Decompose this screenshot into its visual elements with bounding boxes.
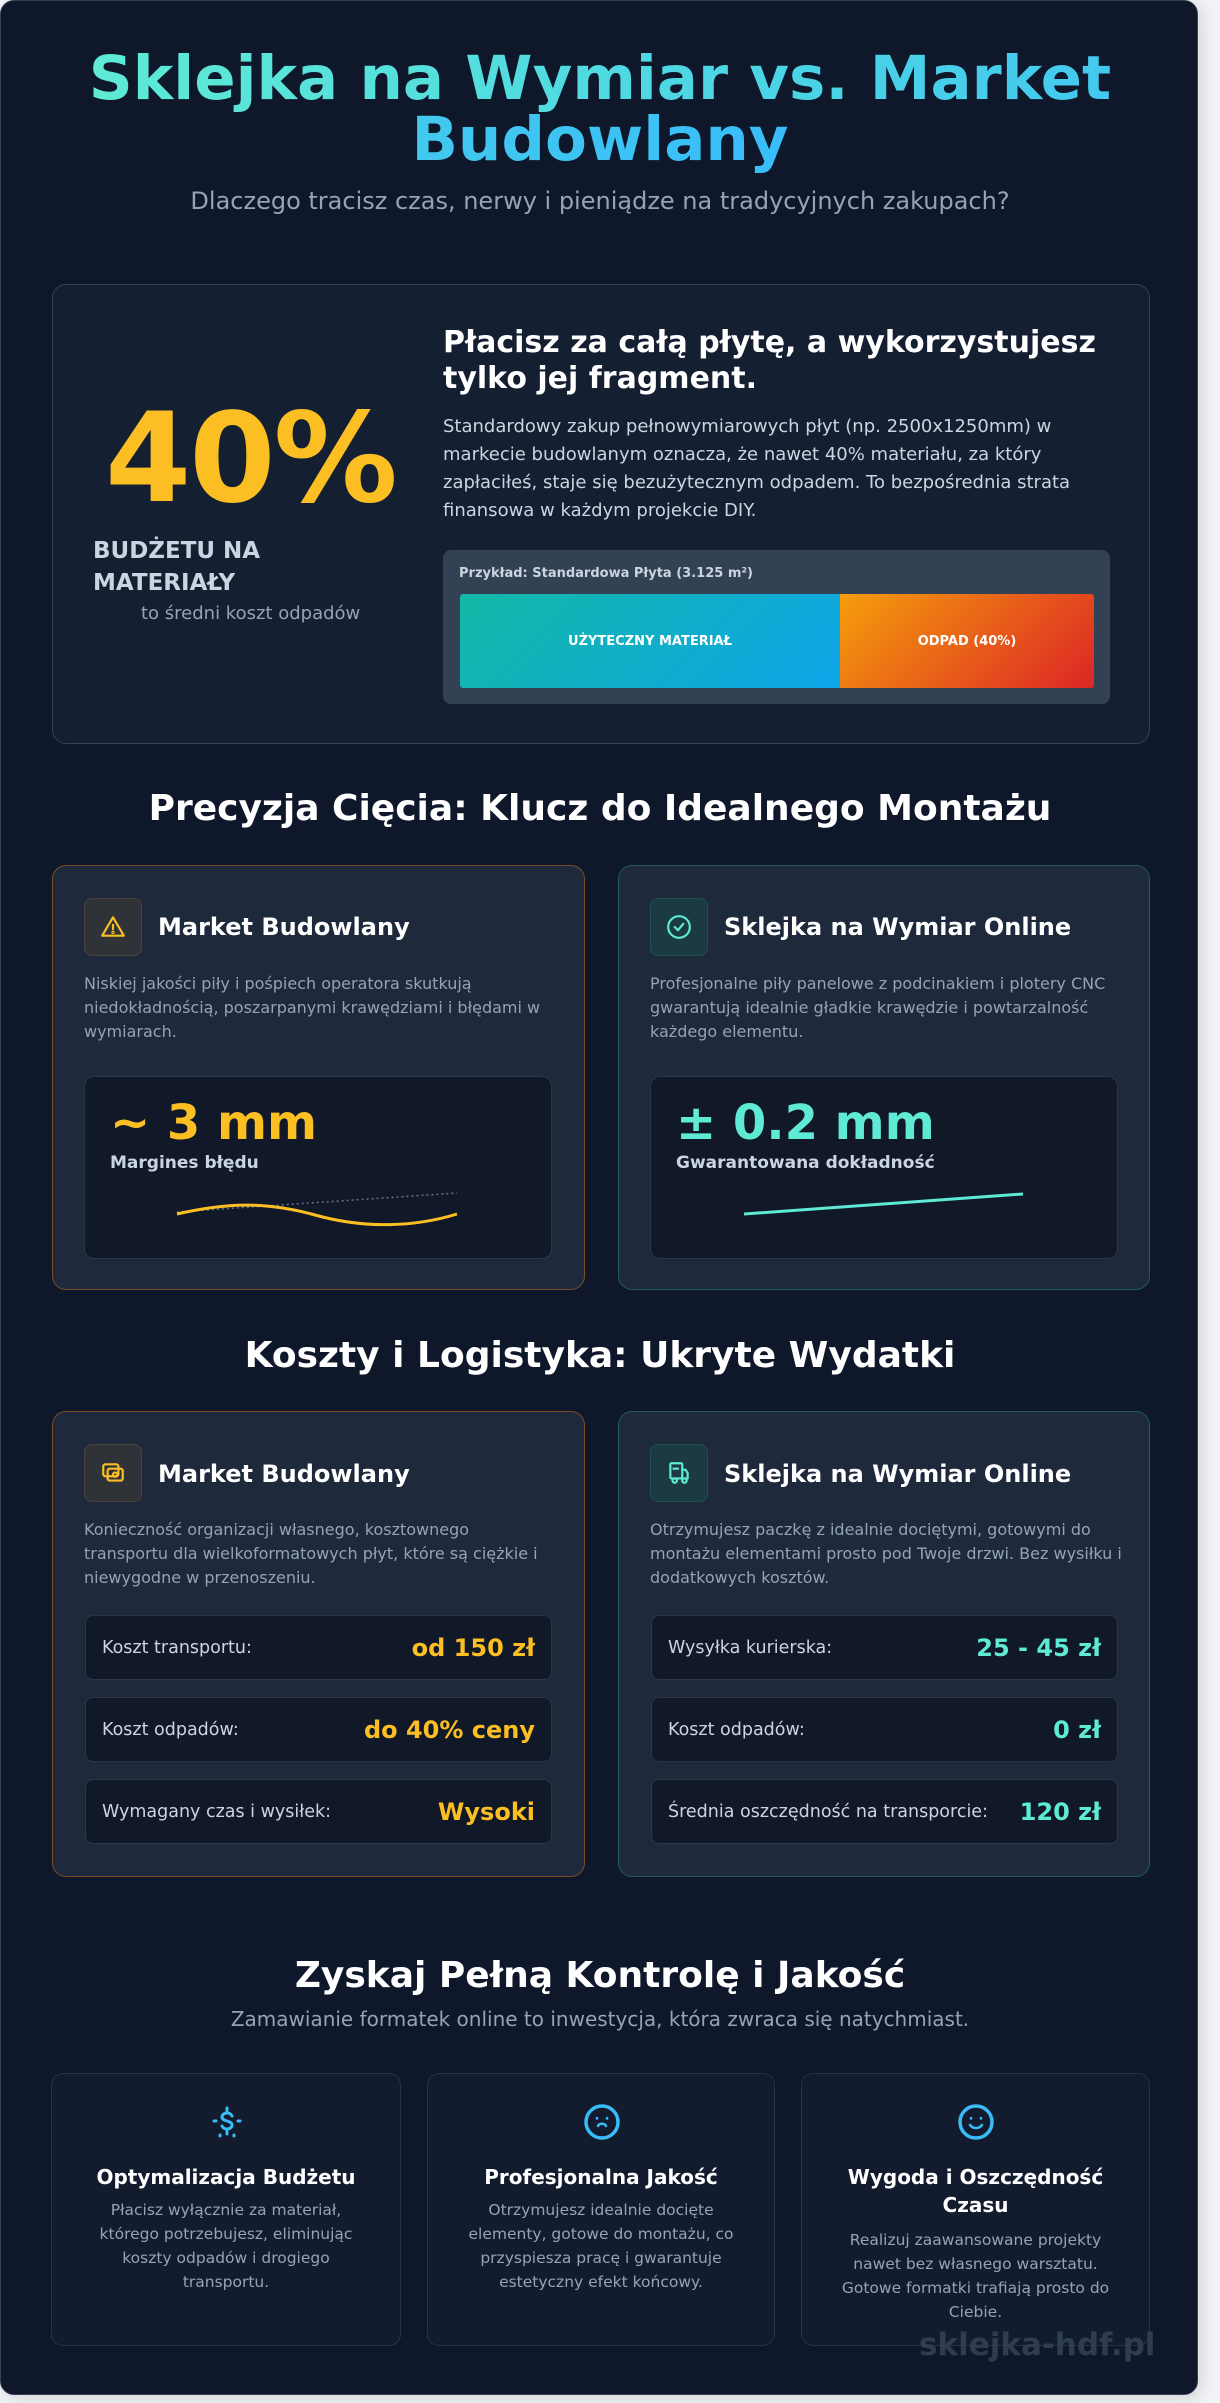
icon: warning (84, 898, 142, 956)
stat label (93, 536, 260, 596)
row: effort: Wymagany czas i wysiłek: (102, 1802, 331, 1822)
section heading: control: Zyskaj Pełną Kontrolę i Jakość (295, 1955, 905, 1996)
icon: face (584, 2104, 620, 2140)
card title: Sklejka na Wymiar Online (724, 1460, 1071, 1488)
icon: truck (650, 1444, 708, 1502)
big stat 40%: 40% (105, 387, 396, 531)
card title: Market Budowlany (158, 913, 410, 941)
stat label: MATERIAŁY (93, 570, 235, 596)
benefit title: Optymalizacja Budżetu (96, 2165, 356, 2189)
card title: Market Budowlany (158, 1460, 410, 1488)
paragraph: Standardowy zakup pełnowymiarowych płyt (np. 2500x1250mm) w markecie budowlanym oznacza, że nawet 40% materiału, za który zapłaciłeś, staje się bezużytecznym odpadem. To bezpośrednia strata finansowa w każdym projekcie DIY. (443, 416, 1070, 521)
row: courier (651, 1615, 1118, 1680)
row: waste: do 40% ceny (364, 1716, 535, 1744)
benefit title: Profesjonalna Jakość (484, 2165, 718, 2189)
watermark: sklejka-hdf.pl (919, 2327, 1155, 2363)
metric box (650, 1076, 1118, 1259)
benefit: quality (427, 2073, 775, 2346)
row: savings (651, 1779, 1118, 1844)
chart: wavy line (176, 1192, 458, 1226)
title: Budowlany (411, 104, 789, 175)
description: Profesjonalne piły panelowe z podcinakiem i plotery CNC gwarantują idealnie gładkie krawędzie i powtarzalność każdego elementu. (650, 974, 1105, 1041)
row: waste: Koszt odpadów: (102, 1720, 239, 1740)
row: savings: 120 zł (1020, 1798, 1101, 1826)
section subtitle: Zamawianie formatek online to inwestycja, która zwraca się natychmiast. (231, 2007, 969, 2031)
benefit text: Realizuj zaawansowane projekty nawet bez własnego warsztatu. Gotowe formatki trafiają prosto do Ciebie. (842, 2231, 1109, 2321)
bar label: Przykład: Standardowa Płyta (3.125 m²) (459, 566, 753, 581)
benefit: budget (51, 2073, 401, 2346)
section heading: costs: Koszty i Logistyka: Ukryte Wydatki (245, 1335, 955, 1376)
stat caption: to średni koszt odpadów (141, 603, 360, 624)
benefit text: Płacisz wyłącznie za materiał, którego potrzebujesz, eliminując koszty odpadów i drogiego transportu. (100, 2201, 352, 2291)
row: transport (85, 1615, 552, 1680)
description: Konieczność organizacji własnego, kosztownego transportu dla wielkoformatowych płyt, które są ciężkie i niewygodne w przenoszeniu. (84, 1520, 538, 1587)
row: transport: od 150 zł (412, 1634, 535, 1662)
panel: waste (52, 284, 1150, 744)
bar waste (840, 594, 1094, 688)
bar waste: ODPAD (40%) (918, 634, 1016, 648)
bar useful: UŻYTECZNY MATERIAŁ (568, 634, 732, 648)
benefit text: Otrzymujesz idealnie docięte elementy, gotowe do montażu, co przyspiesza pracę i gwarantuje estetyczny efekt końcowy. (468, 2201, 734, 2291)
metric box (84, 1076, 552, 1259)
metric value: ~ 3 mm (110, 1095, 317, 1151)
row: effort: Wysoki (438, 1798, 535, 1826)
row: waste: Koszt odpadów: (668, 1720, 805, 1740)
title: Sklejka na Wymiar vs. Market (89, 43, 1111, 114)
row: savings: Średnia oszczędność na transporcie: (668, 1802, 988, 1822)
panel: costs market (52, 1411, 585, 1877)
icon: money (84, 1444, 142, 1502)
icon: check circle (650, 898, 708, 956)
metric value: ± 0.2 mm (676, 1095, 935, 1151)
metric label: Margines błędu (110, 1153, 259, 1173)
row: courier: 25 - 45 zł (976, 1634, 1101, 1662)
row: courier: Wysyłka kurierska: (668, 1638, 832, 1658)
benefit: convenience (801, 2073, 1150, 2346)
heading: Płacisz za całą płytę, a wykorzystujesz tylko jej fragment. (443, 325, 1096, 396)
example bar chart (443, 550, 1110, 704)
row: waste: 0 zł (1053, 1716, 1101, 1744)
description: Otrzymujesz paczkę z idealnie dociętymi, gotowymi do montażu elementami prosto pod Twoje drzwi. Bez wysiłku i dodatkowych kosztów. (650, 1520, 1122, 1587)
section heading: precision: Precyzja Cięcia: Klucz do Idealnego Montażu (149, 788, 1051, 829)
icon: dollar (212, 2106, 242, 2138)
bar useful (460, 594, 840, 688)
row: waste (85, 1697, 552, 1762)
chart: straight line (744, 1192, 1024, 1216)
panel: precision online (618, 865, 1150, 1290)
icon: smile (958, 2104, 994, 2140)
row: effort (85, 1779, 552, 1844)
panel: precision market (52, 865, 585, 1290)
metric label: Gwarantowana dokładność (676, 1153, 935, 1173)
row: transport: Koszt transportu: (102, 1638, 252, 1658)
card title: Sklejka na Wymiar Online (724, 913, 1071, 941)
stat label: BUDŻETU NA (93, 538, 260, 564)
title (89, 43, 1111, 175)
benefit title: Wygoda i Oszczędność Czasu (848, 2165, 1103, 2217)
row: waste (651, 1697, 1118, 1762)
subtitle: Dlaczego tracisz czas, nerwy i pieniądze na tradycyjnych zakupach? (190, 187, 1010, 215)
panel: costs online (618, 1411, 1150, 1877)
description: Niskiej jakości piły i pośpiech operatora skutkują niedokładnością, poszarpanymi krawędziami i błędami w wymiarach. (84, 974, 540, 1041)
